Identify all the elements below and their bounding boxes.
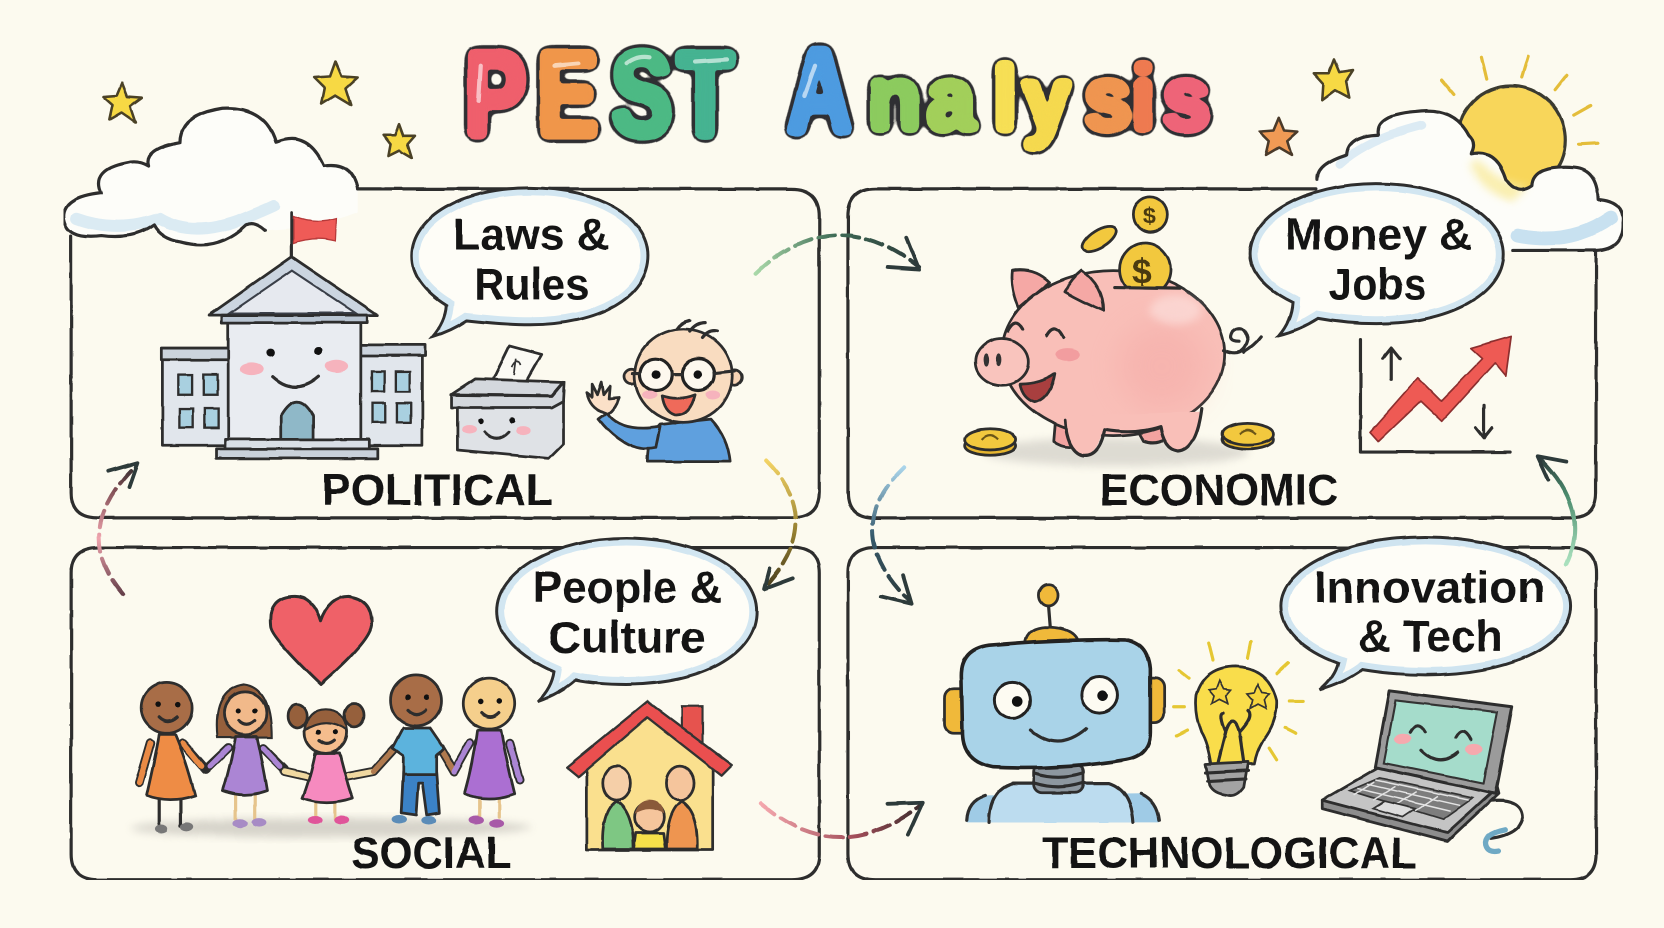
coin falling top: $ [1143,203,1156,229]
coin on floor right [1223,423,1273,449]
cloud left [64,108,358,245]
laptop [1322,691,1523,851]
cable [1490,801,1523,838]
arms [139,743,520,783]
star 2 [314,62,358,105]
family holding hands [132,675,531,837]
pig tail [1224,328,1261,353]
arrow: economic to technological [873,467,912,604]
person 5 [464,678,515,828]
panel: technological [848,537,1596,880]
arrow: social to political [99,463,138,594]
title: T [677,25,733,162]
title: s [1084,46,1132,149]
person 4 [391,675,444,825]
person 2 [217,684,272,828]
building [161,212,426,458]
person 3: girl [288,704,364,825]
flag [292,212,336,257]
star 5 [1260,118,1298,155]
star 1 [103,83,142,122]
label: economic: ECONOMIC [1099,466,1338,515]
speech bubble: innovation and tech [1281,537,1571,690]
speech bubble: laws and rules: Rules [474,260,589,309]
coin in slot [1120,243,1171,296]
title: y [1022,46,1071,149]
heart [270,596,372,684]
title: E [537,25,598,162]
speech bubble: money and jobs: Jobs [1329,260,1426,309]
title: a [926,46,976,149]
cloud right [1317,111,1623,250]
arms outline [139,743,520,783]
label: technological: TECHNOLOGICAL [1042,829,1417,878]
speech bubble: innovation and tech: & Tech [1358,613,1503,662]
speech bubble: money and jobs [1250,184,1504,335]
label: political: POLITICAL [322,466,553,515]
speech bubble: laws and rules: Laws & [453,210,609,259]
title: S [611,25,672,162]
star 3 [383,124,415,158]
title: i [1131,46,1155,149]
speech bubble: laws and rules [412,188,648,336]
person waving [587,320,742,462]
title: s [1162,46,1211,149]
panel: social [71,538,819,880]
arrow: technological to economic [1538,456,1575,565]
title: A [787,23,852,159]
piggy bank [965,196,1273,466]
person 1 [141,682,195,833]
arrow: social to technological [761,802,923,837]
sun [1441,56,1598,194]
title: n [868,46,921,149]
coin falling top [1133,196,1167,232]
growth chart [1360,336,1511,452]
speech bubble: people and culture: Culture [549,614,706,663]
light bulb [1174,642,1303,796]
coin falling tilted [1079,221,1120,256]
title: l [993,46,1017,149]
robot [944,585,1164,822]
star 4 [1314,59,1353,100]
coin in slot: $ [1132,252,1152,291]
speech bubble: money and jobs: Money & [1285,210,1472,259]
panel: political [71,188,819,518]
arrow: political to economic [756,235,919,274]
title [465,23,1211,162]
label: social: SOCIAL [351,829,512,878]
house [567,701,732,850]
robot arms and body [967,783,1159,822]
coin on floor left [965,429,1016,455]
panel: economic [848,184,1596,518]
ballot box [451,346,565,458]
speech bubble: people and culture [497,538,757,701]
arrow: political to social [764,461,796,589]
speech bubble: people and culture: People & [533,564,722,613]
speech bubble: innovation and tech: Innovation [1314,564,1545,613]
title: P [465,25,526,162]
